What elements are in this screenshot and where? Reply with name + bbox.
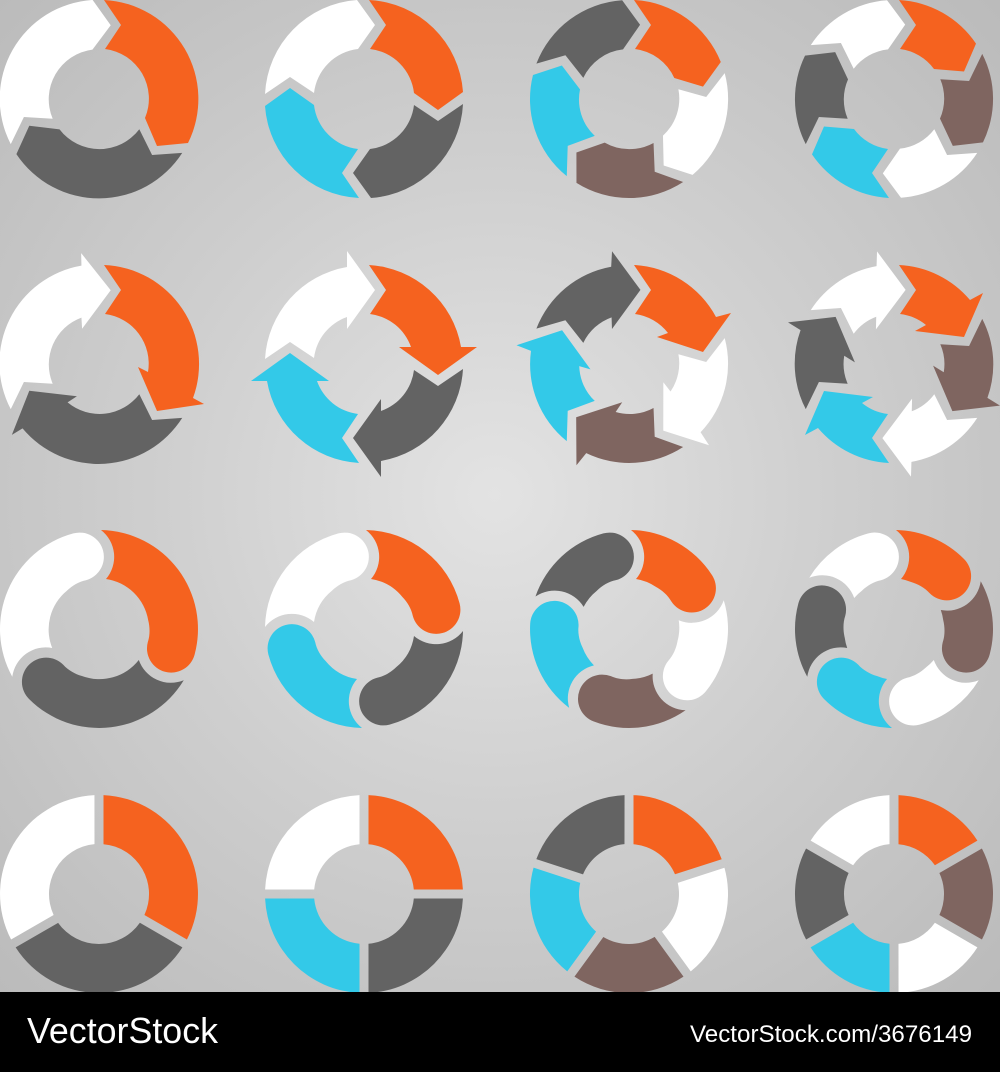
chevron ring, 4 segments bbox=[265, 0, 463, 198]
rounded ring, 3 segments bbox=[0, 522, 198, 764]
segment: brown bbox=[921, 848, 1000, 952]
segment: blue bbox=[817, 658, 892, 728]
arrow: white bbox=[642, 338, 755, 457]
segment: blue bbox=[812, 126, 889, 198]
segment: white bbox=[880, 645, 979, 745]
chevron ring, 3 segments bbox=[0, 0, 198, 235]
segment: orange bbox=[366, 530, 460, 634]
segment: white bbox=[642, 73, 752, 182]
plain ring, 5 segments bbox=[496, 775, 752, 1028]
segment: blue bbox=[500, 591, 618, 708]
segment: white bbox=[811, 0, 911, 81]
segment: gray bbox=[767, 42, 868, 144]
segment: orange bbox=[631, 530, 716, 613]
arrow: orange bbox=[899, 265, 983, 337]
arrow: white bbox=[811, 237, 915, 346]
segment: orange bbox=[369, 0, 463, 110]
arrow: orange bbox=[369, 265, 477, 375]
segment: gray bbox=[767, 836, 867, 940]
segment: gray bbox=[770, 577, 868, 677]
arrow: brown bbox=[920, 319, 1000, 428]
segment: white bbox=[265, 795, 360, 890]
segment: orange bbox=[104, 0, 198, 146]
rounded ring, 5 segments bbox=[500, 516, 750, 760]
segment: white bbox=[811, 772, 911, 876]
footer brand name: VectorStock bbox=[27, 1010, 219, 1051]
segment: white bbox=[645, 600, 750, 707]
segment: gray bbox=[10, 875, 182, 1029]
segment: white bbox=[877, 912, 977, 1016]
segment: brown bbox=[920, 581, 1000, 681]
arrow ring, 4 arrows bbox=[251, 251, 477, 477]
arrow: blue bbox=[488, 314, 618, 441]
rounded ring, 6 segments bbox=[770, 513, 1000, 745]
segment: brown bbox=[568, 644, 686, 760]
segment: blue bbox=[496, 855, 614, 971]
segment: brown bbox=[920, 54, 1000, 156]
arrow ring, 6 arrows bbox=[764, 237, 1000, 491]
segment: white bbox=[877, 117, 977, 220]
chevron ring, 5 segments bbox=[497, 0, 752, 233]
segment: gray bbox=[535, 516, 640, 622]
segment: orange bbox=[634, 0, 721, 87]
segment: white bbox=[649, 868, 752, 976]
arrow: blue bbox=[805, 391, 889, 463]
segment: blue bbox=[265, 898, 360, 993]
footer band bbox=[0, 992, 1000, 1072]
segment: orange bbox=[101, 530, 198, 673]
footer image id: VectorStock.com/3676149 bbox=[690, 1021, 972, 1048]
arrow: white bbox=[873, 382, 977, 491]
segment: orange bbox=[104, 795, 198, 940]
arrow: orange bbox=[104, 265, 204, 411]
segment: orange bbox=[368, 795, 463, 890]
segment: blue bbox=[811, 923, 890, 993]
arrow: blue bbox=[251, 353, 359, 463]
segment: blue bbox=[268, 624, 362, 728]
arrow: gray bbox=[536, 236, 649, 356]
segment: brown bbox=[566, 913, 683, 1028]
segment: gray bbox=[9, 80, 182, 235]
segment: gray bbox=[353, 104, 463, 198]
segment: gray bbox=[359, 631, 463, 725]
segment: white bbox=[0, 0, 137, 144]
plain ring, 6 segments bbox=[767, 772, 1000, 1016]
segment: white bbox=[265, 0, 375, 94]
segment: orange bbox=[898, 795, 977, 865]
segment: brown bbox=[562, 112, 683, 233]
arrow ring, 3 arrows bbox=[0, 250, 204, 504]
plain ring, 3 segments bbox=[0, 786, 198, 1029]
arrow: brown bbox=[554, 377, 683, 504]
segment: orange bbox=[634, 795, 722, 874]
arrow: white bbox=[0, 250, 137, 409]
segment: gray bbox=[536, 0, 646, 90]
arrow: gray bbox=[764, 300, 868, 409]
arrow: white bbox=[265, 251, 375, 359]
arrow ring, 5 arrows bbox=[488, 236, 755, 504]
segment: gray bbox=[12, 609, 184, 764]
plain ring, 4 segments bbox=[265, 795, 463, 993]
segment: white bbox=[809, 513, 908, 613]
chevron ring, 6 segments bbox=[767, 0, 1000, 220]
segment: white bbox=[0, 522, 136, 677]
segment: gray bbox=[368, 898, 463, 993]
segment: white bbox=[0, 786, 136, 940]
arrow: gray bbox=[6, 345, 182, 504]
rounded ring, 4 segments bbox=[265, 530, 463, 728]
segment: blue bbox=[265, 88, 359, 198]
segment: orange bbox=[896, 530, 971, 600]
segment: white bbox=[265, 533, 369, 627]
arrow: gray bbox=[353, 369, 463, 477]
segment: orange bbox=[899, 0, 976, 72]
segment: blue bbox=[497, 55, 618, 176]
segment: gray bbox=[536, 775, 639, 884]
arrow: orange bbox=[634, 265, 731, 352]
